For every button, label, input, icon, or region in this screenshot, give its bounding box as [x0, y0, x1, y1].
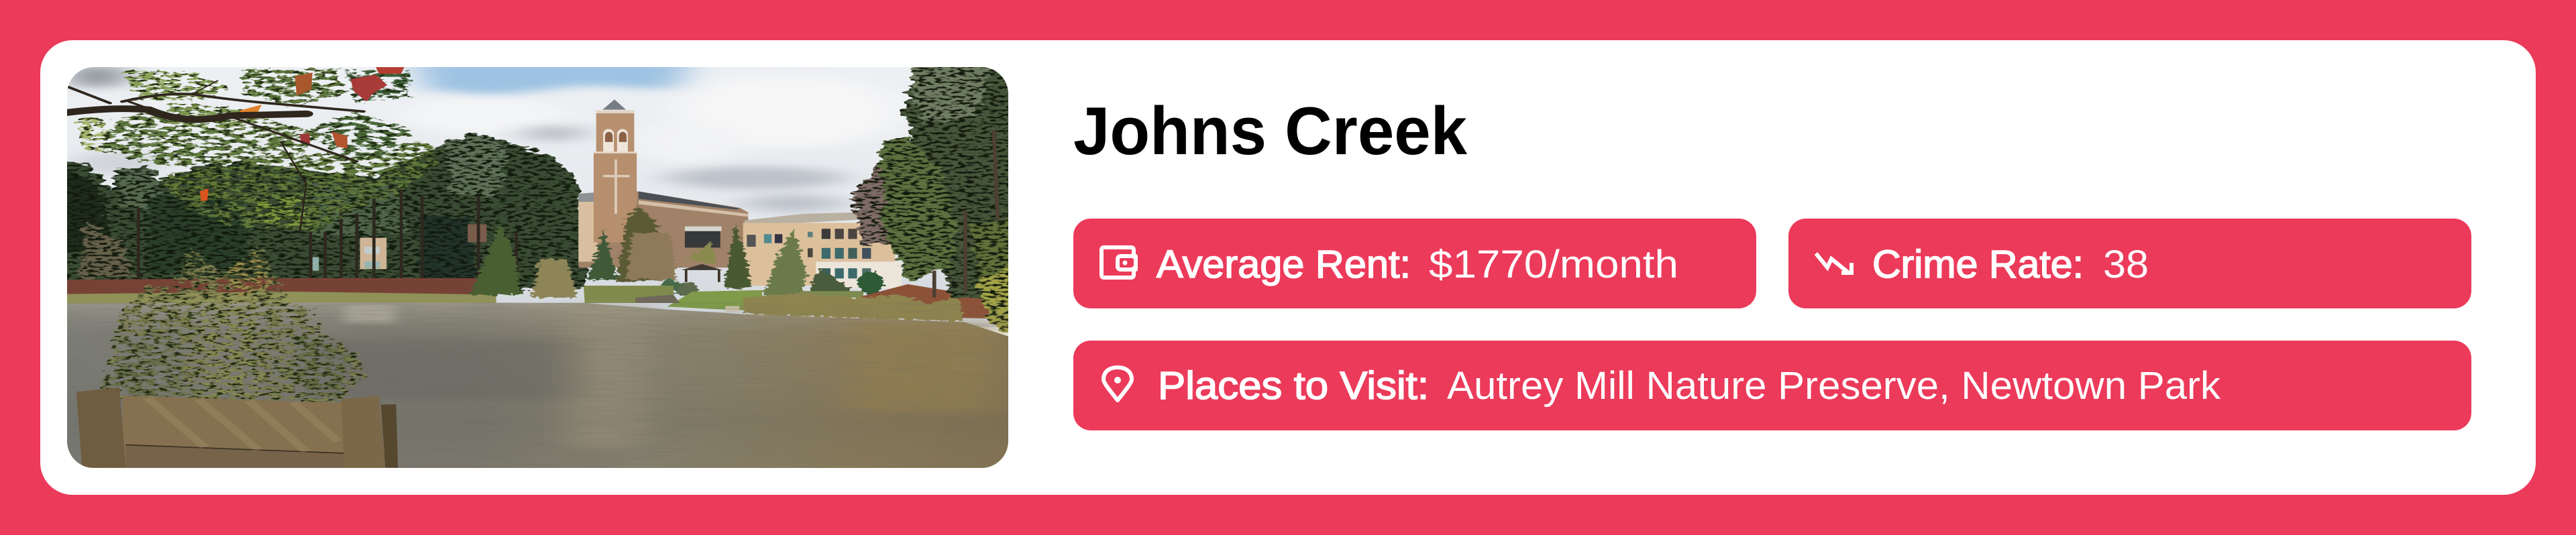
title: Johns Creek — [1073, 94, 1468, 169]
label: crime rate: Crime Rate: — [1872, 243, 2084, 286]
right trees — [851, 61, 1016, 339]
distant left building — [313, 225, 486, 271]
panel: crime rate — [1788, 219, 2471, 308]
foreground maple tree foliage — [78, 68, 445, 232]
lawn and shoreline — [584, 284, 990, 322]
foreground shrub — [97, 244, 366, 402]
photo: lake and bell tower — [40, 58, 1033, 474]
tree branches — [59, 80, 363, 232]
label: average rent: Average Rent: — [1157, 243, 1411, 286]
bushes and trees in front of buildings — [471, 206, 883, 298]
tree trunks — [138, 190, 517, 290]
panel: average rent — [1073, 219, 1756, 308]
value: places: Autrey Mill Nature Preserve, Newtown Park — [1447, 364, 2221, 408]
right school building — [743, 213, 902, 289]
icon: wallet — [1102, 247, 1136, 278]
value: crime rate: 38 — [2103, 243, 2149, 286]
far tree line — [59, 133, 598, 289]
icon: map pin — [1104, 367, 1132, 400]
mulch ground — [67, 278, 496, 294]
autumn leaves — [200, 67, 405, 201]
icon: trending down — [1816, 253, 1851, 274]
sky — [40, 58, 1033, 328]
left grass strip — [67, 292, 496, 304]
wooden planter — [76, 388, 398, 468]
tall pine trunks — [934, 130, 998, 298]
label: places to visit: Places to Visit: — [1158, 364, 1429, 408]
panel: places to visit — [1073, 341, 2471, 430]
gazebo — [681, 264, 723, 282]
value: rent: $1770/month — [1429, 243, 1678, 286]
water — [40, 302, 1033, 474]
tower — [596, 110, 634, 155]
bell tower building — [578, 99, 748, 268]
